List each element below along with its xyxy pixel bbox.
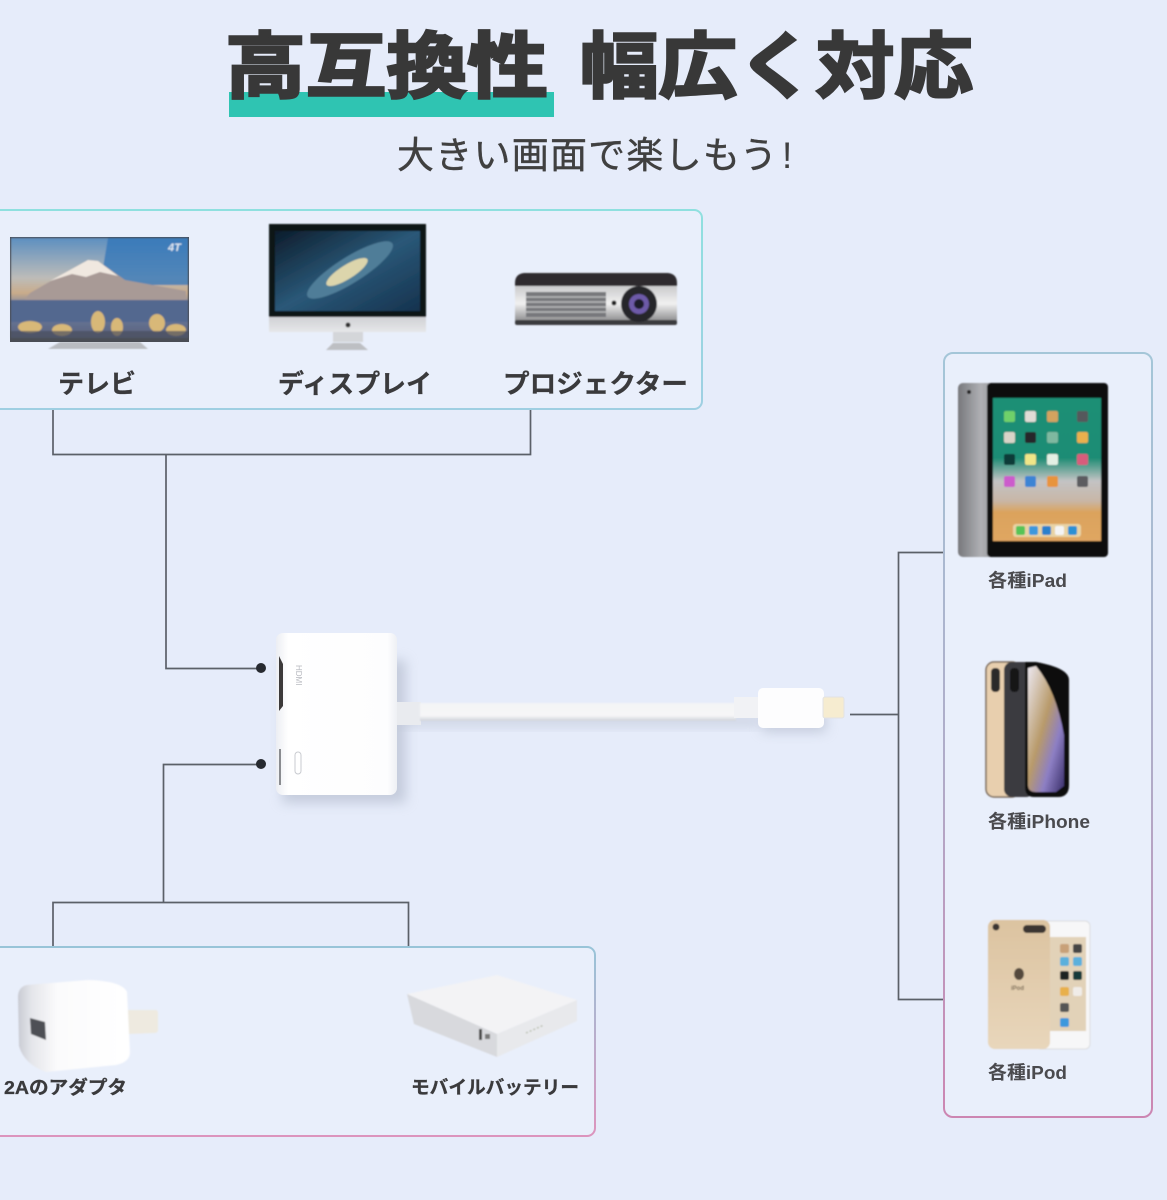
label: television: テレビ xyxy=(58,369,136,399)
label: display: ディスプレイ xyxy=(278,369,432,399)
connector lines: lightning to devices xyxy=(850,552,944,1000)
icon: iPhone xyxy=(986,662,1069,797)
adapter body xyxy=(276,633,397,795)
title text left: 高互換性 xyxy=(225,28,548,108)
icon: iPod touch: iPod xyxy=(1011,986,1024,992)
label: projector: プロジェクター xyxy=(503,369,688,399)
Lightning connector xyxy=(758,688,824,728)
label: iPad: 各種iPad xyxy=(988,570,1067,591)
label: battery: モバイルバッテリー xyxy=(411,1077,579,1098)
connector lines: outputs to HDMI port xyxy=(53,409,530,668)
device: Lightning to HDMI adapter xyxy=(276,633,844,803)
icon: television xyxy=(10,237,189,349)
icon: mobile battery xyxy=(407,975,577,1057)
HDMI marking: HDMI xyxy=(294,665,303,685)
cable xyxy=(397,702,421,725)
panel: Apple devices xyxy=(944,353,1152,1117)
HDMI port xyxy=(279,656,283,711)
icon: iPad xyxy=(958,383,1108,557)
subtitle: 大きい画面で楽しもう xyxy=(397,135,777,176)
label: adapter: 2Aのアダプタ xyxy=(4,1077,127,1098)
Lightning port xyxy=(279,749,281,785)
connector dot: charging xyxy=(256,759,266,769)
icon: desktop display xyxy=(269,224,426,350)
icon: television: 4T xyxy=(167,242,182,254)
connector lines: power to charging port xyxy=(53,764,408,946)
title text right: 幅広く対応 xyxy=(580,28,973,108)
panel: display outputs xyxy=(0,210,702,409)
adapter shadow xyxy=(282,660,406,803)
icon: USB power adapter xyxy=(18,980,158,1072)
connector dot: HDMI xyxy=(256,663,266,673)
port symbol xyxy=(295,752,301,774)
label: iPod: 各種iPod xyxy=(988,1062,1067,1083)
title underline xyxy=(229,92,554,117)
title xyxy=(225,28,973,117)
icon: iPod touch xyxy=(988,920,1090,1049)
label: iPhone: 各種iPhone xyxy=(988,811,1090,832)
icon: projector xyxy=(515,273,677,325)
subtitle: ! xyxy=(782,135,792,176)
connector shadow xyxy=(762,712,826,732)
panel: power sources xyxy=(0,947,595,1136)
cable shadow xyxy=(400,716,760,726)
